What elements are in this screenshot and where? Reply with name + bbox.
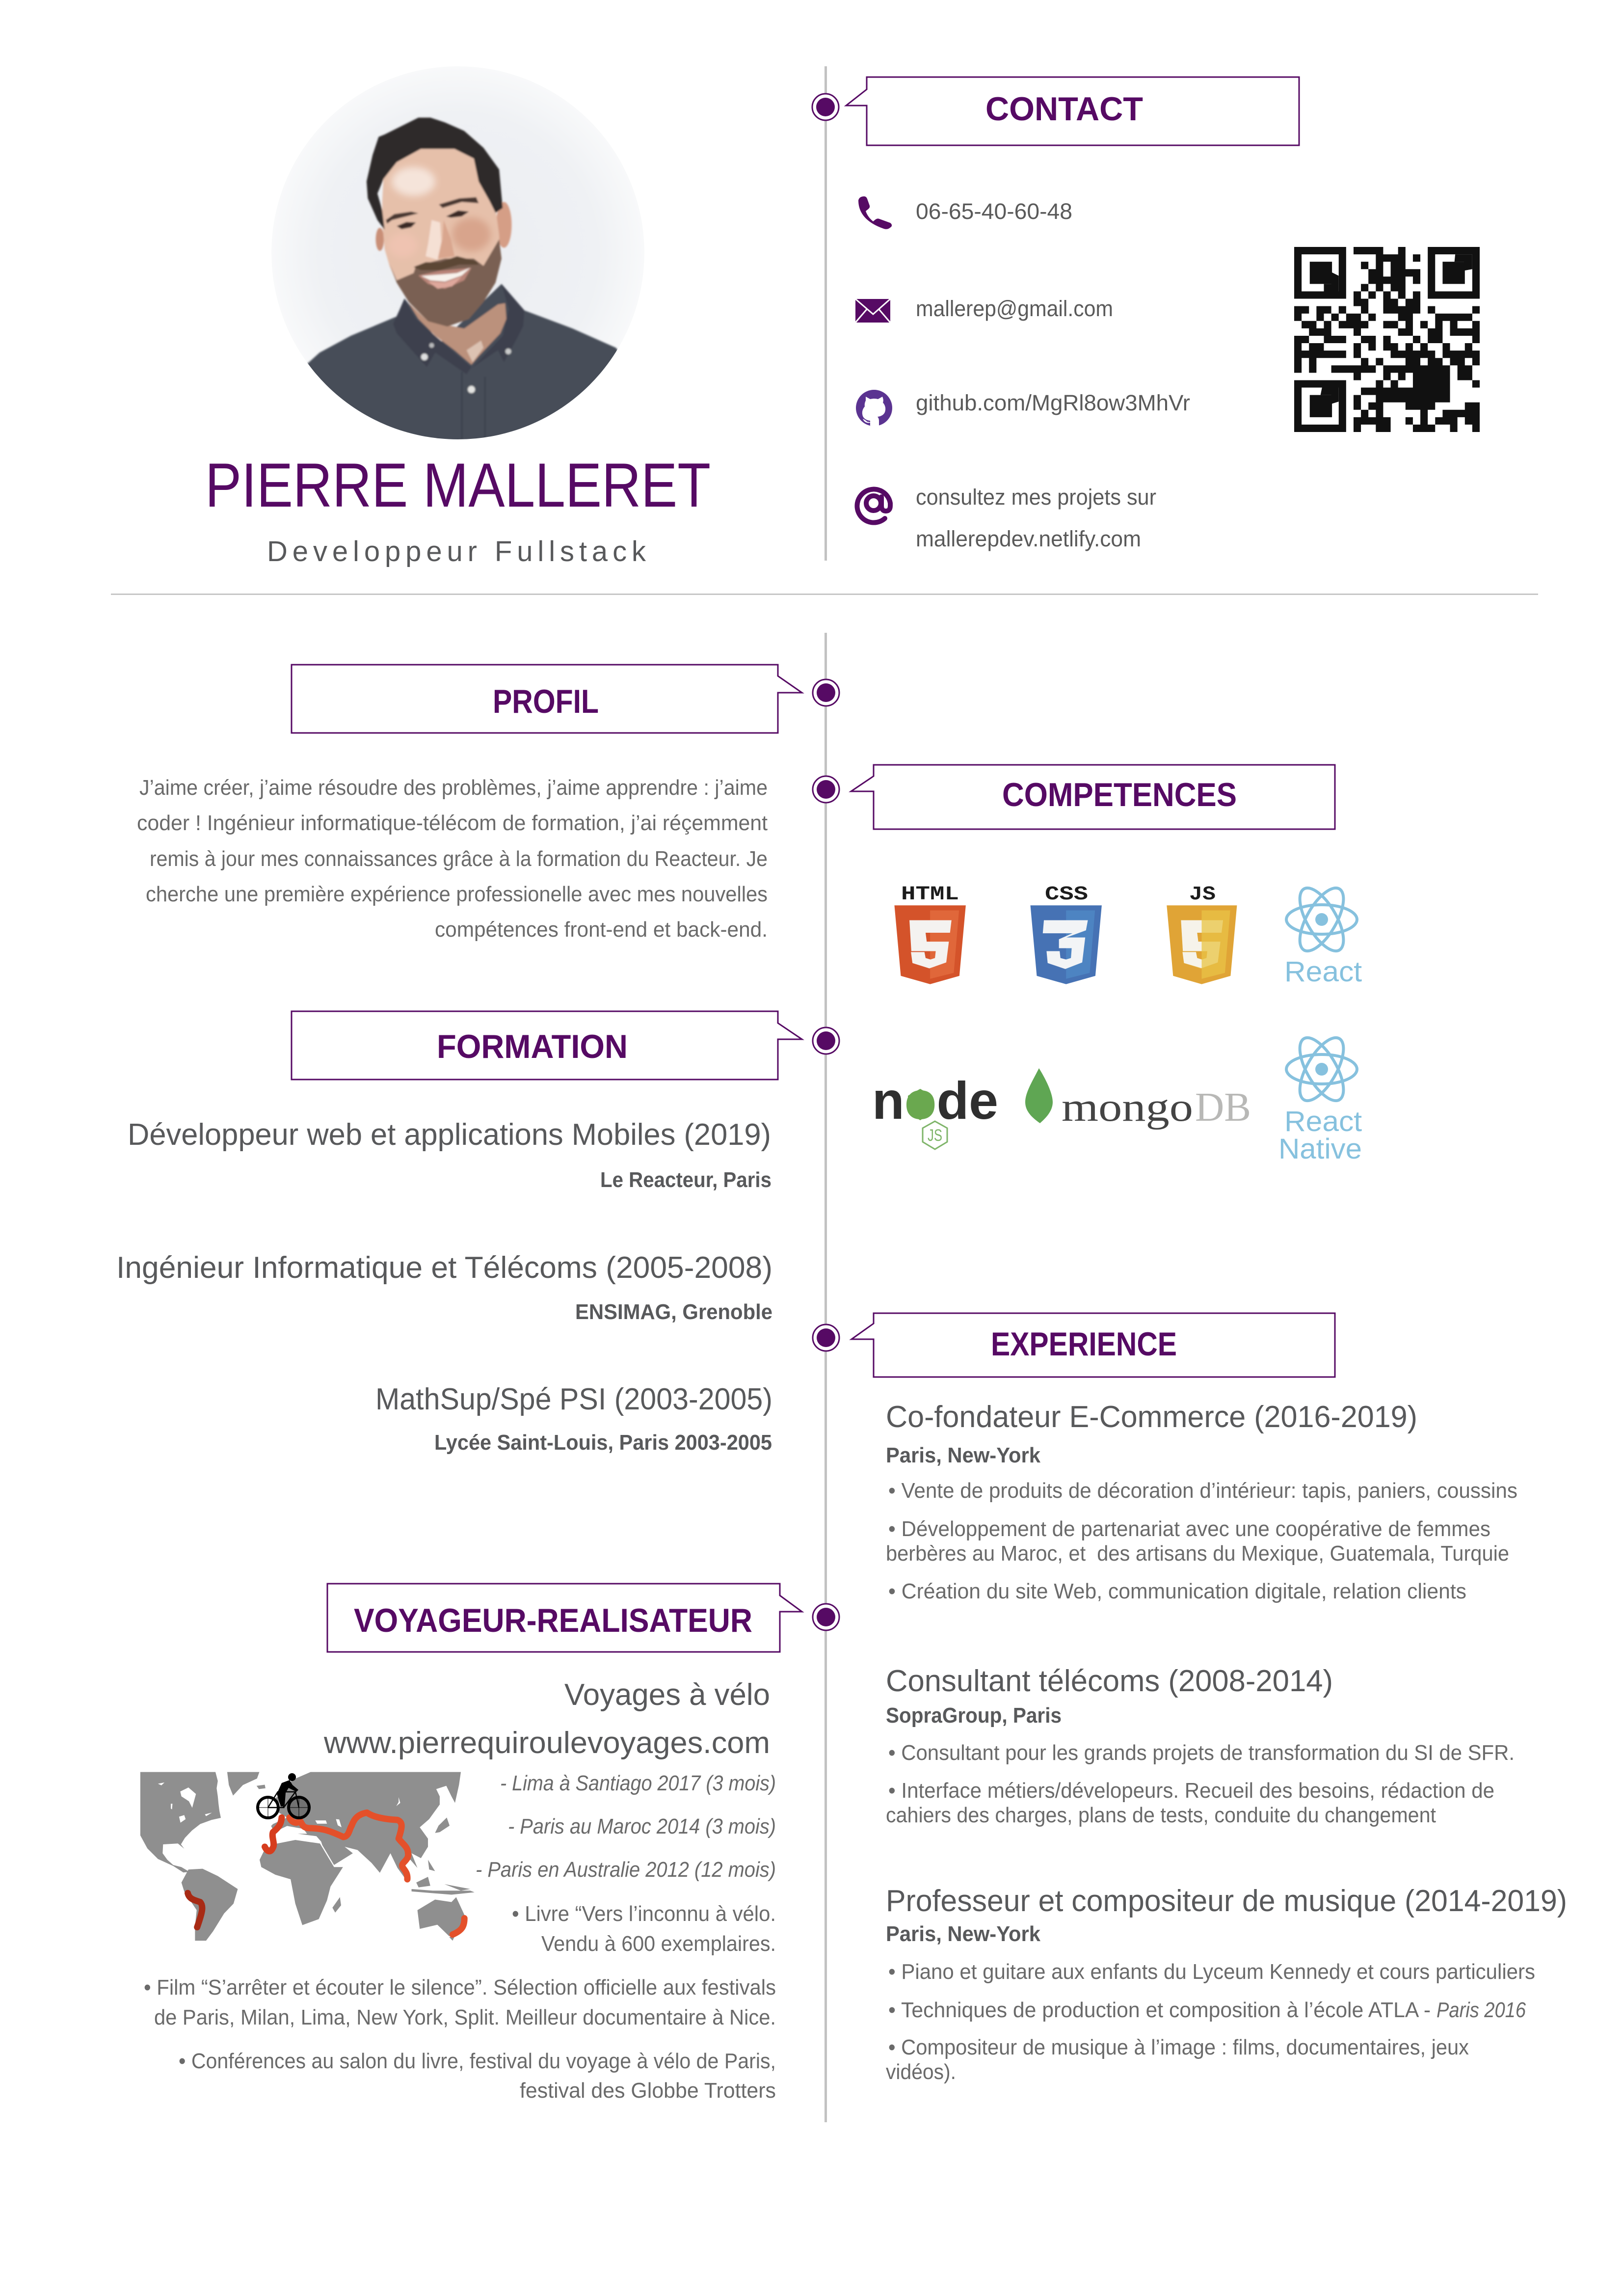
experience item: professeur: • Compositeur de musique à l’image : films, documentaires, jeux [888, 2035, 1469, 2059]
name: PIERRE MALLERET [205, 450, 711, 520]
list: trips and works: • Livre “Vers l’inconnu à vélo. [512, 1902, 776, 1926]
experience item: co-fondateur: berbères au Maroc, et des artisans du Mexique, Guatemala, Turquie [886, 1541, 1509, 1566]
experience item: professeur: • Piano et guitare aux enfants du Lyceum Kennedy et cours particuliers [888, 1960, 1535, 1984]
experience item: consultant: SopraGroup, Paris [886, 1703, 1062, 1728]
experience item: professeur: Paris, New-York [886, 1922, 1040, 1946]
experience item: consultant: • Consultant pour les grands projets de transformation du SI de SFR. [888, 1741, 1515, 1765]
panel: competences [813, 765, 1362, 1165]
experience item: professeur [886, 1884, 1567, 2084]
experience item: professeur: • Techniques de production et composition à l’école ATLA - [888, 1998, 1437, 2022]
panel: experience [813, 1313, 1567, 2084]
formation item: mathsup [375, 1382, 772, 1455]
text: github url: github.com/MgRl8ow3MhVr [916, 390, 1190, 415]
panel: contact [812, 77, 1480, 551]
experience item: consultant: cahiers des charges, plans de tests, conduite du changement [886, 1803, 1436, 1827]
formation item: ingenieur: ENSIMAG, Grenoble [575, 1300, 772, 1324]
text: phone number: 06-65-40-60-48 [916, 199, 1072, 224]
route: Paris to Australia [290, 1812, 408, 1879]
experience item: consultant: • Interface métiers/dévelopeurs. Recueil des besoins, rédaction de [888, 1779, 1494, 1803]
text block: profil: remis à jour mes connaissances grâce à la formation du Reacteur. Je [150, 847, 768, 871]
experience item: co-fondateur: • Développement de partenariat avec une coopérative de femmes [888, 1517, 1490, 1541]
land masses [140, 1772, 475, 1941]
heading: voyageur realisateur: VOYAGEUR-REALISATEUR [354, 1602, 752, 1639]
logo: React Native [1278, 1031, 1362, 1165]
logo: React: React [1284, 956, 1362, 988]
heading: formation [292, 1011, 802, 1080]
formation item: mathsup: MathSup/Spé PSI (2003-2005) [375, 1382, 772, 1416]
logo: HTML5 [894, 884, 966, 984]
logo: React Native: React [1284, 1106, 1362, 1137]
text: website url: mallerepdev.netlify.com [916, 526, 1141, 551]
experience item: professeur: vidéos). [886, 2060, 956, 2084]
list: trips and works: • Film “S’arrêter et écouter le silence”. Sélection officielle aux festivals [144, 1975, 776, 1999]
logo: React [1284, 882, 1362, 988]
formation item: developpeur web: Développeur web et applications Mobiles (2019) [128, 1118, 771, 1152]
logo: MongoDB: DB [1195, 1084, 1251, 1130]
heading: experience [851, 1313, 1335, 1377]
timeline: top vertical line [825, 66, 827, 561]
heading: voyageur realisateur [327, 1584, 802, 1652]
experience item: professeur: Paris 2016 [1437, 1998, 1526, 2022]
logo: JavaScript: JS [1189, 884, 1216, 906]
experience item: consultant: Consultant télécoms (2008-2014) [886, 1664, 1333, 1698]
experience item: professeur: Professeur et compositeur de musique (2014-2019) [886, 1884, 1567, 1918]
timeline marker: voyageur [813, 1604, 839, 1630]
formation item: developpeur web: Le Reacteur, Paris [600, 1168, 772, 1192]
heading: contact: CONTACT [985, 90, 1143, 128]
portrait photo [271, 66, 644, 452]
timeline: main vertical line [825, 633, 827, 2122]
logo: CSS3 [1030, 884, 1102, 984]
subheading: voyages: Voyages à vélo [564, 1678, 770, 1712]
panel: voyageur realisateur [140, 1584, 839, 2103]
subheading: website: www.pierrequiroulevoyages.com [323, 1726, 770, 1760]
heading: profil: PROFIL [493, 683, 599, 720]
timeline marker: formation [813, 1027, 839, 1054]
experience item: consultant [886, 1664, 1515, 1827]
job title: Developpeur Fullstack [267, 536, 646, 567]
heading: formation: FORMATION [437, 1028, 628, 1065]
heading: competences [851, 765, 1335, 829]
world map with routes [140, 1772, 475, 1941]
text block: profil: coder ! Ingénieur informatique-télécom de formation, j’ai réçemment [137, 811, 768, 835]
logo: MongoDB [1025, 1068, 1251, 1130]
logo: HTML5: HTML [901, 884, 959, 906]
QR code [1294, 247, 1480, 432]
horizontal divider [111, 594, 1538, 595]
text block: profil [137, 776, 768, 942]
icon: envelope [855, 299, 890, 323]
text: website intro: consultez mes projets sur [916, 485, 1156, 510]
panel: header identity [205, 66, 711, 567]
timeline marker: contact [812, 94, 839, 120]
formation item: ingenieur [116, 1251, 772, 1324]
logo: Node.js: node [872, 1071, 998, 1130]
logo: CSS3: CSS [1045, 884, 1088, 906]
experience item: co-fondateur [886, 1400, 1517, 1603]
list: trips and works: - Paris au Maroc 2014 (3 mois) [508, 1814, 776, 1838]
timeline marker: competences [813, 776, 839, 803]
list: trips and works: - Lima à Santiago 2017 (3 mois) [500, 1771, 776, 1795]
panel: profil [137, 665, 839, 942]
route: Paris to Morocco [265, 1817, 282, 1851]
experience item: co-fondateur: • Vente de produits de décoration d’intérieur: tapis, paniers, coussins [888, 1479, 1517, 1503]
logo: React Native: Native [1278, 1133, 1362, 1165]
heading: competences: COMPETENCES [1002, 776, 1237, 813]
experience item: co-fondateur: • Création du site Web, communication digitale, relation clients [888, 1579, 1466, 1603]
formation item: ingenieur: Ingénieur Informatique et Télécoms (2005-2008) [116, 1251, 772, 1285]
list: trips and works: de Paris, Milan, Lima, New York, Split. Meilleur documentaire à Nice. [154, 2005, 776, 2029]
formation item: mathsup: Lycée Saint-Louis, Paris 2003-2005 [434, 1431, 772, 1455]
route: Australia coast [452, 1918, 464, 1935]
formation item: developpeur web [128, 1118, 772, 1192]
text block: profil: J’aime créer, j’aime résoudre des problèmes, j’aime apprendre : j’aime [139, 776, 768, 800]
logo: Node.js: JS [928, 1126, 942, 1145]
experience item: co-fondateur: Paris, New-York [886, 1443, 1040, 1467]
panel: formation [116, 1011, 839, 1455]
logo: MongoDB: mongo [1062, 1084, 1193, 1130]
icon: at sign [857, 489, 890, 523]
list: trips and works [144, 1771, 776, 2103]
text block: profil: compétences front-end et back-end. [435, 918, 768, 942]
text: email: mallerep@gmail.com [916, 296, 1113, 321]
logo: JavaScript [1167, 884, 1237, 984]
icon: cyclist [258, 1773, 309, 1818]
icon: github [856, 390, 892, 426]
heading: profil [292, 665, 802, 733]
list: trips and works: festival des Globbe Trotters [520, 2079, 776, 2103]
route: Lima to Santiago [188, 1893, 202, 1927]
list: trips and works: Vendu à 600 exemplaires. [541, 1932, 776, 1956]
experience item: co-fondateur: Co-fondateur E-Commerce (2016-2019) [886, 1400, 1417, 1434]
list: trips and works: • Conférences au salon du livre, festival du voyage à vélo de Paris, [179, 2049, 776, 2073]
heading: contact [846, 77, 1299, 145]
timeline marker: profil [813, 679, 839, 706]
heading: experience: EXPERIENCE [991, 1325, 1177, 1363]
icon: phone [858, 196, 892, 229]
text block: profil: cherche une première expérience professionelle avec mes nouvelles [146, 882, 768, 906]
timeline marker: experience [813, 1324, 839, 1351]
list: trips and works: - Paris en Australie 2012 (12 mois) [476, 1858, 776, 1882]
